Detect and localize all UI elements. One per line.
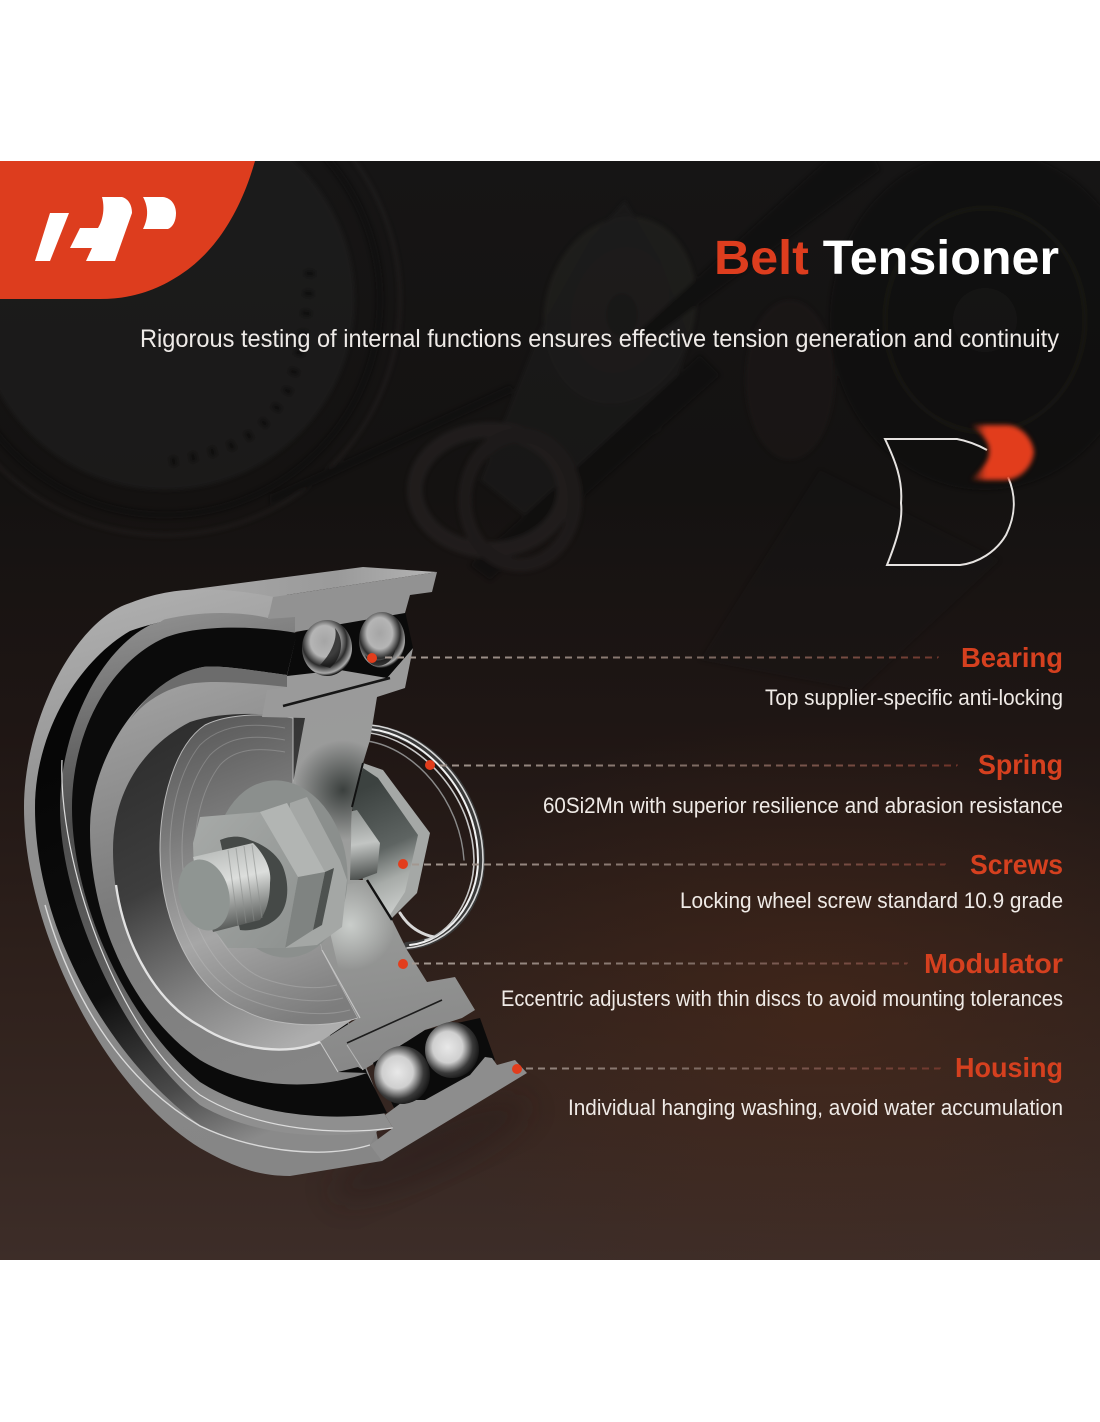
housing face — [268, 572, 437, 632]
web slits and edges — [283, 678, 442, 1072]
dish — [160, 715, 358, 1025]
upper bearing balls — [302, 612, 405, 676]
badge shape — [0, 161, 255, 299]
callout dots — [367, 653, 522, 1074]
shell outer band — [24, 583, 382, 1176]
icon: belt route outline with red pulley — [885, 425, 1034, 565]
hub washer — [203, 772, 359, 966]
callout: Spring: Spring — [978, 749, 1063, 780]
hex nut — [193, 803, 334, 948]
subtitle: Rigorous testing of internal functions ensures effective tension generation and continuity — [140, 325, 1059, 353]
callout: Spring — [543, 749, 1063, 818]
bearing cutaway illustration — [24, 567, 527, 1176]
shell top front — [130, 589, 273, 630]
callout: Housing: Housing — [955, 1052, 1063, 1083]
callout: Modulator — [501, 948, 1063, 1011]
title: Belt Tensioner — [714, 232, 1059, 285]
nut inner collar — [220, 837, 287, 930]
black band — [35, 615, 385, 1152]
callout: Housing: Individual hanging washing, avoid water accumulation — [568, 1095, 1063, 1120]
lower race black cavity — [373, 1018, 495, 1110]
callout: Bearing — [765, 642, 1063, 710]
callout: Spring: 60Si2Mn with superior resilience and abrasion resistance — [543, 793, 1063, 818]
threaded rod — [327, 810, 380, 883]
washer disc behind web — [352, 763, 430, 920]
bright edge line — [116, 885, 320, 1050]
callout: Screws: Locking wheel screw standard 10.9 grade — [680, 888, 1063, 913]
callout: Housing — [568, 1052, 1063, 1120]
callout: Screws: Screws — [970, 849, 1063, 880]
band upper piece — [130, 612, 295, 660]
upper race black cavity — [287, 611, 413, 678]
inner black band — [72, 628, 387, 1117]
web cross-section — [262, 648, 475, 1072]
callout: Screws — [680, 849, 1063, 913]
logo mark — [35, 197, 176, 261]
bolt — [171, 843, 270, 936]
dish turning lines — [170, 725, 350, 1014]
hairline on shell — [45, 905, 370, 1152]
callout: Bearing: Bearing — [961, 642, 1063, 673]
web highlight — [320, 880, 400, 975]
callout: Modulator: Eccentric adjusters with thin discs to avoid mounting tolerances — [501, 986, 1063, 1011]
housing top surface — [187, 567, 437, 597]
spring — [367, 725, 483, 948]
callout: Bearing: Top supplier-specific anti-locking — [765, 685, 1063, 710]
locking flange — [285, 797, 347, 948]
lower bearing balls — [374, 1022, 479, 1104]
logo badge — [0, 161, 255, 299]
ring upper shade — [130, 667, 287, 720]
stripe band — [60, 614, 393, 1135]
dark well — [113, 714, 358, 1049]
ring — [90, 667, 367, 1084]
hairline on stripes — [62, 760, 393, 1131]
lower outer race — [370, 1057, 527, 1161]
faded engine photo — [16, 220, 692, 568]
callout: Modulator: Modulator — [924, 948, 1063, 979]
shadow under bearing — [319, 1080, 541, 1220]
leader lines — [385, 658, 957, 1069]
web shading — [293, 738, 371, 845]
